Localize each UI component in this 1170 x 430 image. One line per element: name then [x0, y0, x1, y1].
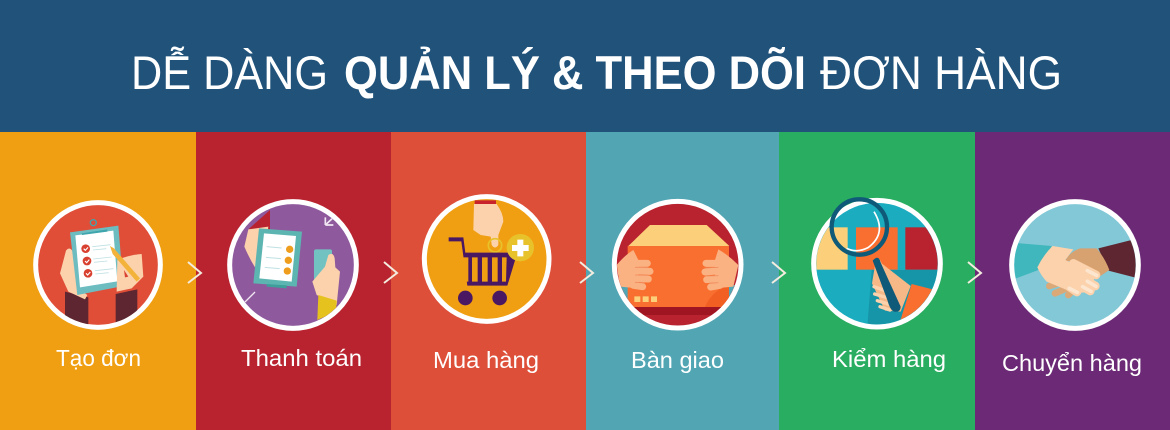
label: Mua hàng: Mua hàng — [433, 347, 539, 373]
panel: Bàn giao — [586, 132, 785, 430]
panel: Tạo đơn — [0, 132, 201, 430]
arrow — [188, 262, 201, 283]
header band — [0, 0, 1170, 132]
panel: Mua hàng — [391, 132, 593, 430]
title: ĐƠN HÀNG — [820, 46, 1062, 99]
title: QUẢN LÝ & THEO DÕI — [344, 46, 806, 99]
panel: Chuyển hàng — [975, 132, 1170, 430]
panel: Thanh toán — [196, 132, 397, 430]
icon: payment — [230, 202, 356, 328]
label: Tạo đơn: Tạo đơn — [56, 345, 141, 371]
label: Thanh toán: Thanh toán — [241, 345, 362, 371]
label: Kiểm hàng: Kiểm hàng — [832, 346, 946, 372]
icon: magnifying glass — [814, 199, 940, 327]
label: Bàn giao: Bàn giao — [631, 347, 724, 373]
icon: handshake — [1012, 202, 1138, 328]
title: DỄ DÀNG — [131, 46, 328, 99]
panel: Kiểm hàng — [779, 132, 981, 430]
icon: shopping cart — [424, 197, 549, 321]
icon: clipboard and checklist — [36, 203, 160, 327]
arrow — [384, 262, 397, 283]
icon: box in hands — [614, 201, 741, 328]
title — [131, 46, 1062, 99]
label: Chuyển hàng: Chuyển hàng — [1002, 350, 1142, 376]
arrow — [580, 262, 593, 283]
arrow — [968, 262, 981, 283]
arrow — [772, 262, 785, 283]
